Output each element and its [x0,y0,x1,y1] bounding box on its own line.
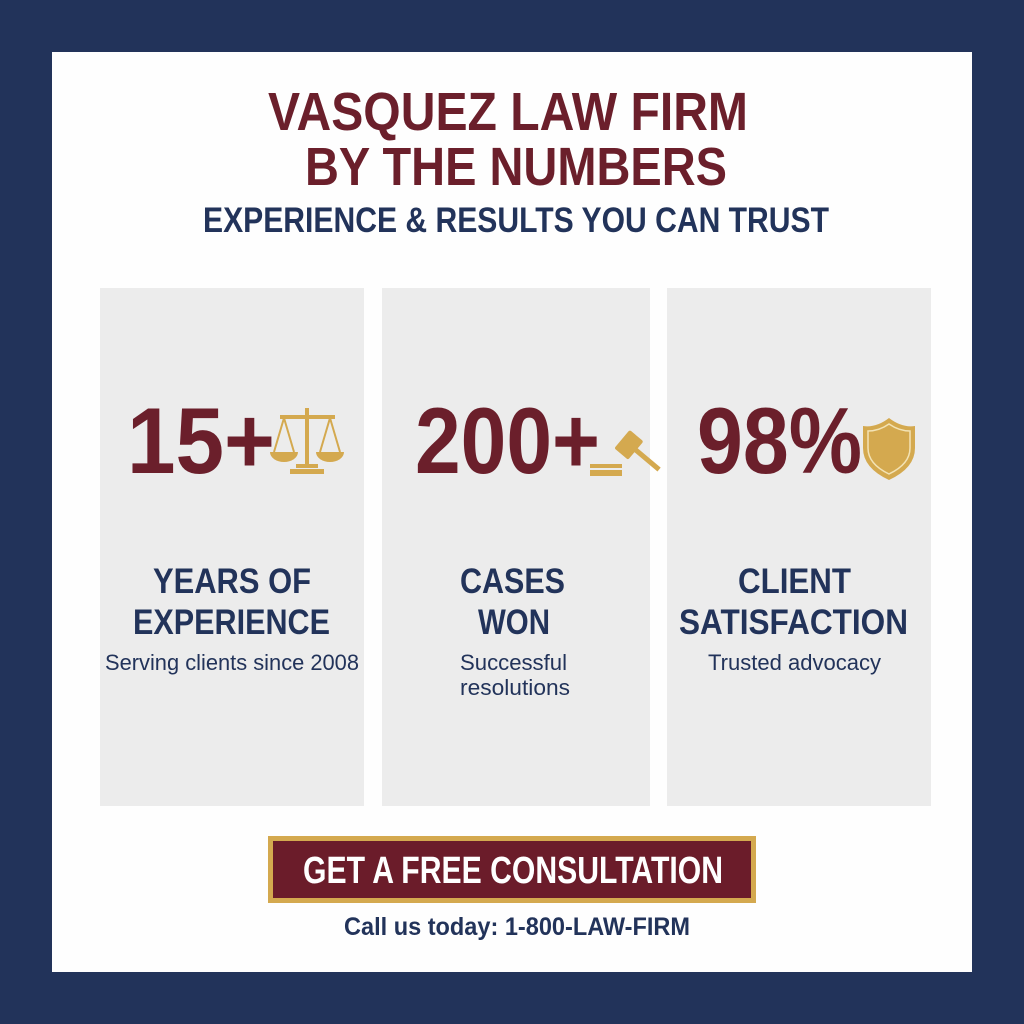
panel: client satisfaction [667,288,931,806]
label: CASES [460,562,565,601]
label: YEARS OF [153,562,311,601]
button: free consultation [268,836,756,903]
panel: years of experience [100,288,364,806]
icon: scales [270,408,344,474]
panel: client satisfaction: SATISFACTION [679,603,908,642]
panel: cases won [382,288,666,806]
panel: cases won: Successful [460,650,567,675]
stat: 200+: 200+ [415,388,600,493]
label: CLIENT [738,562,851,601]
phone text: Call us today: 1-800-LAW-FIRM [344,913,690,941]
panel: years of experience: Serving clients since 2008 [105,650,359,675]
stat: 98%: 98% [697,388,862,493]
panel: years of experience: EXPERIENCE [133,603,330,642]
title [268,82,748,197]
title: VASQUEZ LAW FIRM [268,82,748,142]
stat: 15+: 15+ [127,388,275,493]
panel: cases won: WON [478,603,550,642]
icon: gavel [590,430,666,479]
panel: cases won: resolutions [460,675,570,700]
subtitle: EXPERIENCE & RESULTS YOU CAN TRUST [203,201,829,240]
icon: shield [863,418,915,480]
title: BY THE NUMBERS [305,137,727,197]
button: free consultation: GET A FREE CONSULTATION [303,850,723,892]
panel: client satisfaction: Trusted advocacy [708,650,881,675]
